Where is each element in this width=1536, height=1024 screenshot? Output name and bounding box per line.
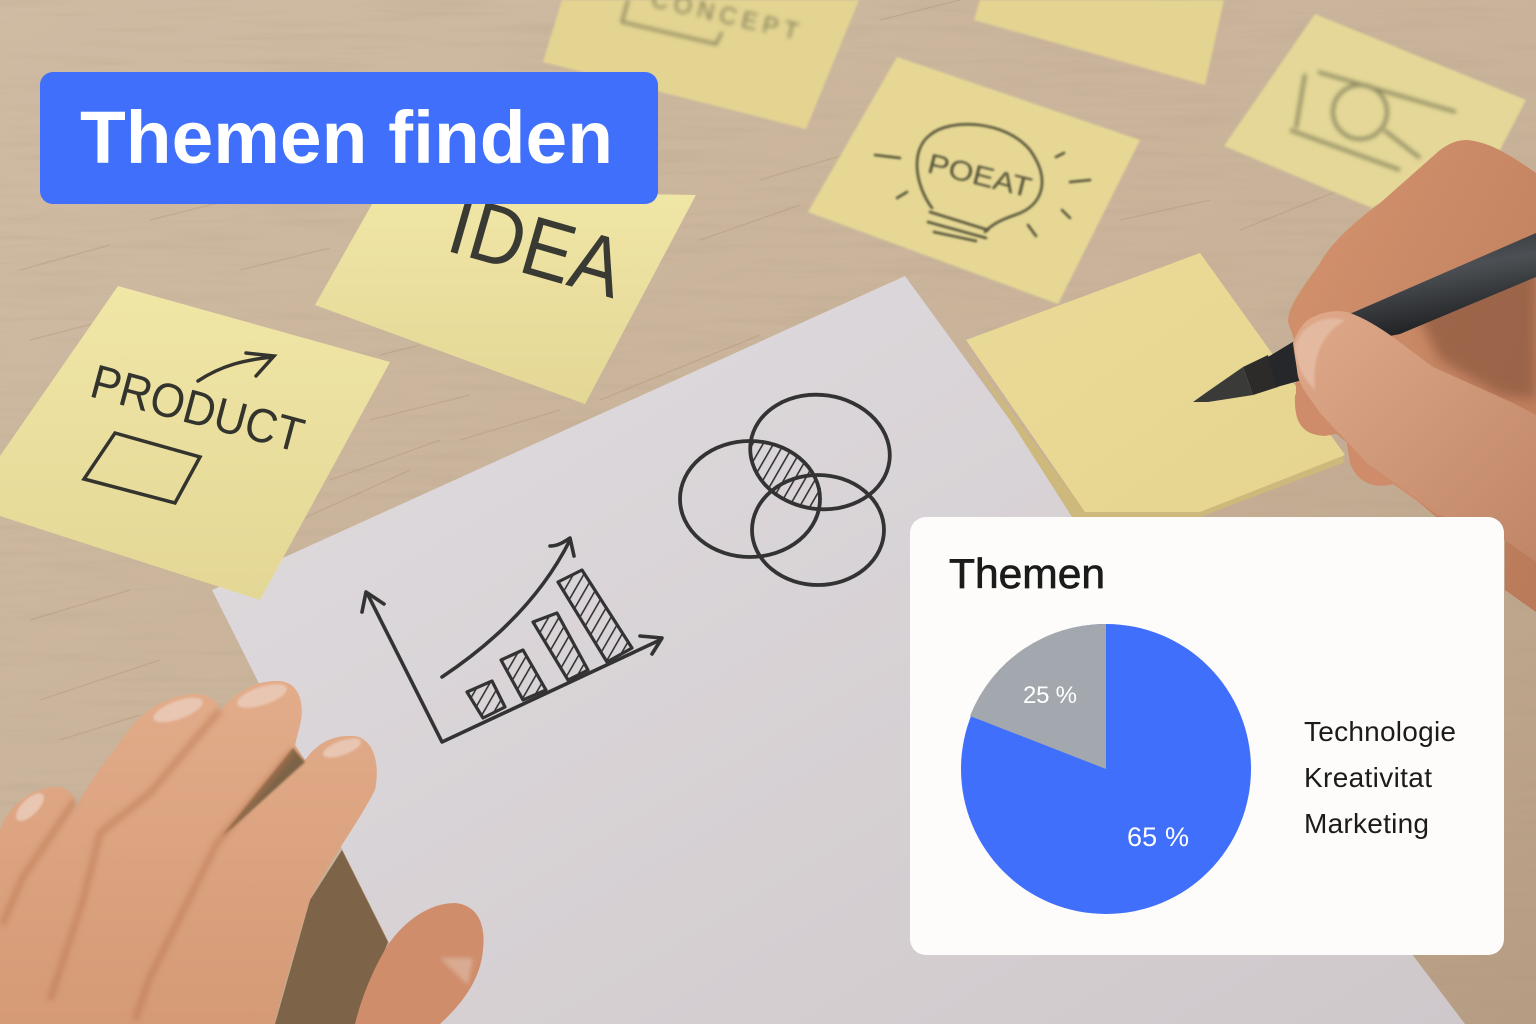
lower fingers: [1295, 380, 1440, 517]
sticky note: IDEA: IDEA: [439, 177, 634, 316]
left hand: [0, 679, 484, 1024]
sticky note pad: [962, 253, 1345, 517]
sticky note: concept (blurred, top): [543, 0, 859, 129]
panel: topics pie chart card: [910, 517, 1504, 955]
pen grip: [1268, 340, 1302, 387]
sticky note: light bulb: POEAT: [925, 148, 1035, 203]
title banner: [40, 72, 658, 204]
line chart sketch: [362, 538, 662, 742]
pie chart: 65 %: [1127, 822, 1189, 852]
thumbnail: [440, 958, 473, 985]
shaded overlap: [752, 442, 822, 508]
sticky note: top centre: [974, 0, 1224, 85]
sticky note: PRODUCT: PRODUCT: [85, 355, 309, 463]
venn diagram sketch: [680, 386, 897, 585]
wood gap between fingers: [222, 748, 305, 836]
paper shadow wood: [275, 850, 388, 1024]
legend: Kreativitat: [1304, 762, 1432, 793]
finger creases: [2, 710, 293, 1020]
hand shape: [1288, 140, 1536, 612]
legend: Technologie: [1304, 716, 1456, 747]
palm shadow: [1410, 260, 1536, 400]
pen barrel: [1345, 233, 1536, 340]
white paper sheet: [212, 276, 1465, 1024]
bars: [467, 570, 632, 718]
sticky note: IDEA: [315, 177, 696, 404]
fingernails: [12, 679, 363, 825]
card heading: Themen: [949, 550, 1105, 597]
title banner: Themen finden: [80, 96, 613, 179]
pie chart: 25 %: [1023, 682, 1077, 709]
pie chart: [961, 624, 1251, 914]
right hand holding pen: [1193, 140, 1536, 612]
pen ferrule: [1243, 355, 1278, 395]
sticky note: PRODUCT: [0, 286, 390, 600]
thumb: [1293, 311, 1536, 562]
thumbnail: [1295, 318, 1345, 390]
legend: [1304, 716, 1456, 839]
legend: Marketing: [1304, 808, 1429, 839]
thumb: [355, 903, 484, 1024]
hand shape: [0, 681, 377, 1024]
sticky note: light bulb: [808, 57, 1140, 304]
pen tip: [1193, 367, 1253, 402]
sticky note: magnifier sketch: [1224, 14, 1526, 208]
